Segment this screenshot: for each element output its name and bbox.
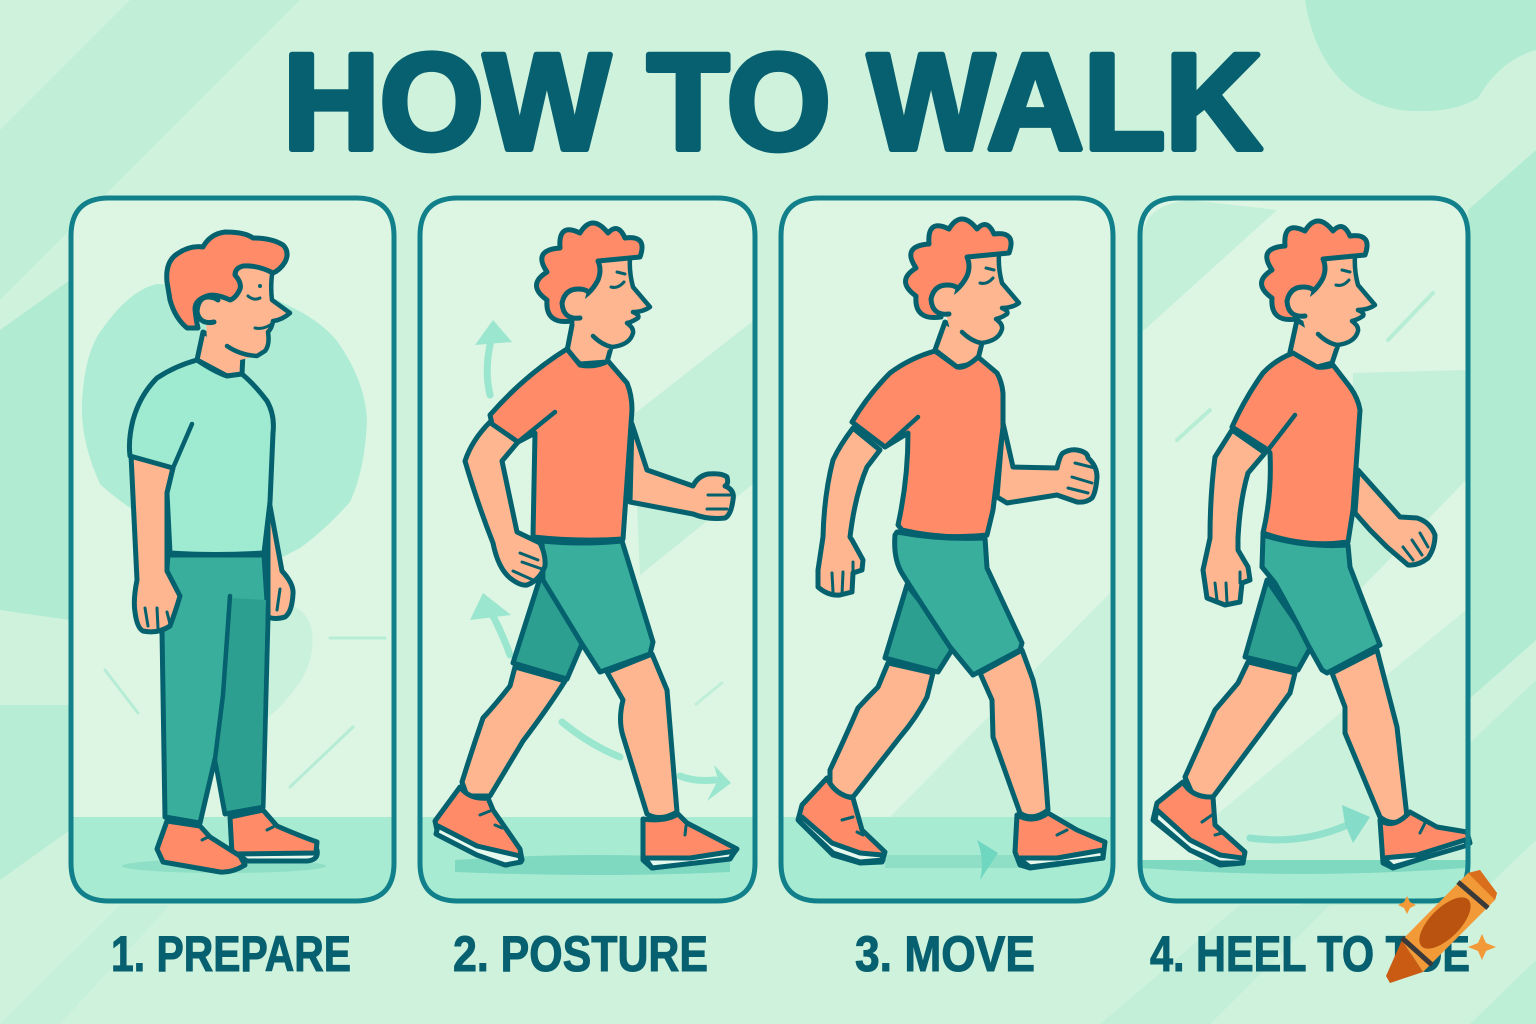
neck [197, 332, 243, 376]
diagonal shade [890, 593, 1110, 817]
shirt [490, 349, 632, 540]
arrow: hip [470, 593, 511, 655]
arrow: heel to toe [1250, 805, 1370, 843]
neck [1290, 320, 1338, 367]
panel: step 2 posture [420, 198, 755, 901]
panel: step 1 prepare [71, 198, 394, 901]
lower shade [1210, 610, 1466, 860]
panel: step 3 move [781, 198, 1113, 901]
panel frame [71, 198, 394, 901]
title: HOW TO WALK [283, 26, 1262, 179]
panel: step 4 heel to toe [1140, 198, 1470, 901]
figure: walking man posture [435, 223, 737, 868]
head [536, 223, 650, 350]
rear shorts [513, 575, 582, 679]
face details [248, 296, 273, 328]
arrow: forward marker [977, 840, 998, 880]
rear leg [1185, 662, 1295, 798]
head [1262, 221, 1375, 350]
floor shadow [455, 855, 730, 875]
front shorts [1262, 535, 1380, 673]
near arm [1203, 430, 1265, 605]
background blob [82, 284, 367, 562]
far arm [1355, 470, 1435, 565]
near arm [818, 428, 880, 595]
near arm [465, 422, 545, 585]
far arm [997, 423, 1097, 503]
trouser crease [215, 596, 230, 759]
head [205, 258, 290, 360]
diagonal shade [633, 321, 753, 575]
front shorts [542, 541, 653, 672]
ground [72, 817, 393, 900]
arrow: forward [562, 722, 731, 801]
back shoe [232, 850, 317, 861]
shirt [129, 360, 273, 554]
rear shorts [1245, 580, 1312, 670]
rear shoe [1153, 782, 1245, 865]
hair [167, 232, 287, 328]
label 1: 1. PREPARE [111, 926, 351, 982]
rear shoe [435, 787, 522, 865]
dark trouser leg [217, 598, 266, 811]
rear shoe [798, 778, 885, 863]
lighter blob [267, 603, 313, 718]
ground [421, 817, 754, 900]
rear shorts [885, 585, 955, 672]
label 2: 2. POSTURE [453, 926, 708, 982]
floor shadow [885, 855, 1060, 868]
figure: walking man heel to toe [1153, 221, 1470, 868]
panel frame [420, 198, 755, 901]
shirt [1232, 353, 1360, 544]
icon: crayon watermark [1386, 870, 1497, 983]
shirt [852, 351, 1003, 537]
front leg [1332, 650, 1407, 822]
front leg [980, 650, 1048, 817]
ear [197, 297, 218, 323]
front shoe [1015, 813, 1105, 868]
figure: standing man [129, 232, 317, 872]
rear leg [830, 663, 933, 797]
front shorts [895, 532, 1022, 675]
neck [567, 320, 612, 364]
ground [1141, 860, 1467, 900]
near arm [131, 455, 180, 632]
front shoe [157, 821, 245, 872]
panel frame [781, 198, 1113, 901]
figure: walking man moving [798, 219, 1105, 868]
floor shadow [1142, 860, 1466, 874]
sleeve crease [173, 424, 192, 468]
floor shadow [122, 859, 326, 873]
head [906, 219, 1019, 348]
front shoe [1380, 812, 1470, 868]
far arm [268, 495, 293, 618]
top-left shade [1142, 200, 1277, 332]
label 4: 4. HEEL TO TOE [1150, 926, 1470, 982]
arrow: up [475, 320, 512, 395]
front leg [607, 654, 677, 818]
trousers [162, 555, 268, 823]
right shade [1350, 370, 1466, 600]
far arm [630, 424, 733, 518]
neck [935, 322, 982, 367]
label 3: 3. MOVE [855, 926, 1035, 982]
rear leg [462, 667, 565, 796]
panel frame [1140, 198, 1468, 901]
front shoe [643, 814, 737, 868]
ground [782, 817, 1112, 900]
motion streaks [105, 638, 385, 787]
